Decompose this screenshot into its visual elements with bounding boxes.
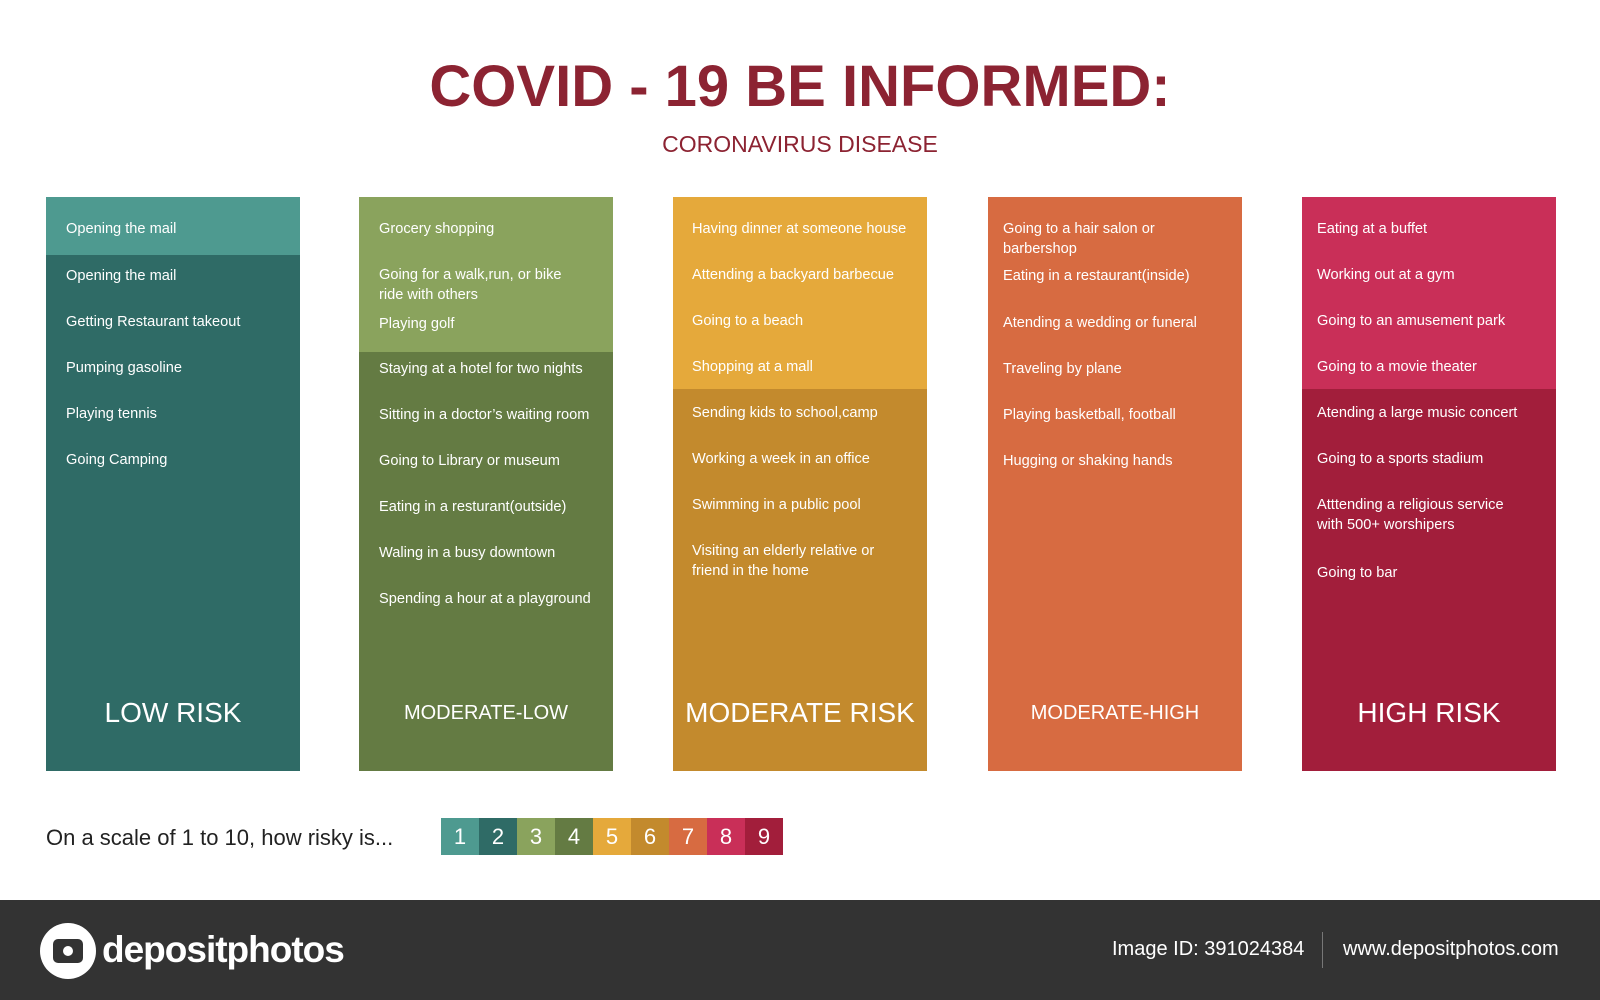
scale boxes: 8	[720, 824, 732, 849]
panel: high risk: Going to bar	[1317, 565, 1397, 581]
title: COVID - 19 BE INFORMED:	[429, 54, 1171, 119]
panel: low risk: LOW RISK	[105, 697, 241, 728]
logo text: depositphotos	[102, 929, 344, 970]
panel: moderate-low: Sitting in a doctor’s waiting room	[379, 407, 589, 423]
scale boxes: 3	[530, 824, 542, 849]
panel: moderate risk	[673, 197, 927, 771]
scale boxes: 4	[568, 824, 580, 849]
panel: moderate-high: Atending a wedding or funeral	[1003, 315, 1197, 331]
panel: moderate risk: Having dinner at someone house	[692, 221, 906, 237]
panel: moderate-high: Going to a hair salon or barbershop	[1003, 221, 1155, 257]
panel: moderate-high: Hugging or shaking hands	[1003, 453, 1173, 469]
scale boxes: 2	[492, 824, 504, 849]
scale question: On a scale of 1 to 10, how risky is...	[46, 825, 393, 850]
website: www.depositphotos.com	[1343, 938, 1559, 960]
panel: low risk: Opening the mail	[66, 221, 176, 237]
image id: Image ID: 391024384	[1112, 938, 1304, 960]
panel: moderate risk: Going to a beach	[692, 313, 803, 329]
panel: low risk: Playing tennis	[66, 406, 157, 422]
panel: moderate-low: Eating in a resturant(outside)	[379, 499, 566, 515]
panel: moderate-low: Playing golf	[379, 316, 454, 332]
scale boxes: 1	[454, 824, 466, 849]
panel: moderate-low: Staying at a hotel for two nights	[379, 361, 583, 377]
panel: high risk: Atttending a religious service with 500+ worshipers	[1317, 497, 1504, 533]
panel: low risk: Getting Restaurant takeout	[66, 314, 240, 330]
panel: low risk: Going Camping	[66, 452, 167, 468]
panel: moderate-high: Eating in a restaurant(inside)	[1003, 268, 1190, 284]
panel: high risk: HIGH RISK	[1357, 697, 1501, 728]
panel: moderate-high: Traveling by plane	[1003, 361, 1122, 377]
panel: moderate risk: Working a week in an office	[692, 451, 870, 467]
panel: high risk: Eating at a buffet	[1317, 221, 1427, 237]
panel: moderate-low: Spending a hour at a playground	[379, 591, 591, 607]
panel: moderate-low: Going to Library or museum	[379, 453, 560, 469]
panel: moderate risk: MODERATE RISK	[685, 697, 915, 728]
panel: moderate-low: MODERATE-LOW	[404, 702, 568, 724]
panel: low risk: Opening the mail	[66, 268, 176, 284]
panel: moderate risk: Attending a backyard barbecue	[692, 267, 894, 283]
panel: moderate-low: Waling in a busy downtown	[379, 545, 555, 561]
panel: high risk: Atending a large music concert	[1317, 405, 1517, 421]
scale boxes: 9	[758, 824, 770, 849]
scale boxes: 6	[644, 824, 656, 849]
scale boxes: 5	[606, 824, 618, 849]
icon: camera logo	[40, 923, 96, 979]
panel: moderate risk: Sending kids to school,camp	[692, 405, 878, 421]
panel: high risk: Working out at a gym	[1317, 267, 1455, 283]
panel: moderate risk: Shopping at a mall	[692, 359, 813, 375]
panel: moderate-high	[988, 197, 1242, 771]
footer bar	[0, 900, 1600, 1000]
panel: high risk	[1302, 197, 1556, 771]
panel: moderate risk: Swimming in a public pool	[692, 497, 861, 513]
panel: moderate-high: Playing basketball, football	[1003, 407, 1176, 423]
panel: high risk: Going to an amusement park	[1317, 313, 1505, 329]
panel: moderate-high: MODERATE-HIGH	[1031, 702, 1199, 724]
panel: high risk: Going to a sports stadium	[1317, 451, 1483, 467]
panel: low risk: Pumping gasoline	[66, 360, 182, 376]
subtitle: CORONAVIRUS DISEASE	[662, 131, 938, 157]
panel: moderate-low	[359, 197, 613, 771]
panel: moderate-low: Grocery shopping	[379, 221, 494, 237]
panel: high risk: Going to a movie theater	[1317, 359, 1477, 375]
panel: moderate-low: Going for a walk,run, or bike ride with others	[379, 267, 562, 303]
panel: low risk	[46, 197, 300, 771]
panel: moderate risk: Visiting an elderly relative or friend in the home	[692, 543, 874, 579]
scale boxes: 7	[682, 824, 694, 849]
